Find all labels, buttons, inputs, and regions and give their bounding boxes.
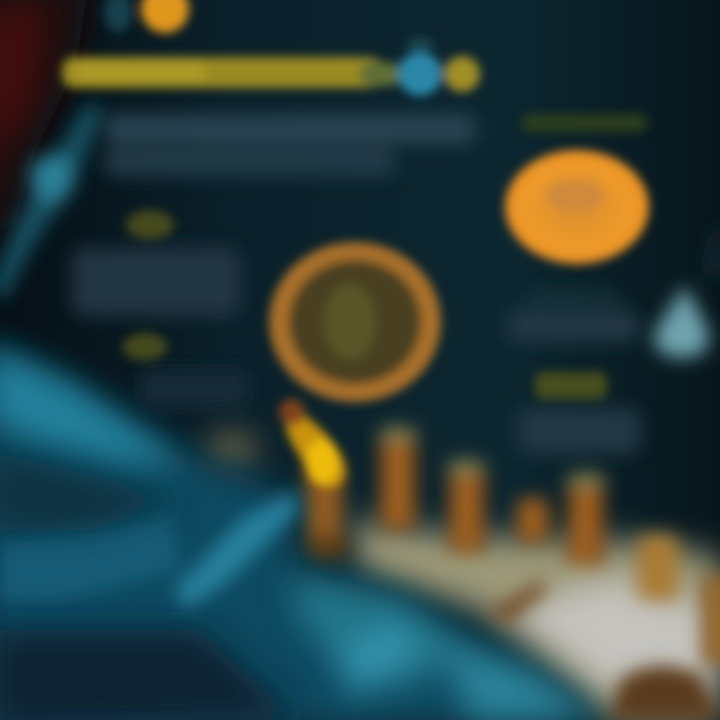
stack 5 xyxy=(566,472,606,565)
cloth highlight: upper fold xyxy=(0,350,190,465)
title bar xyxy=(62,38,480,96)
left heading 1 xyxy=(126,210,174,240)
right text block 1 xyxy=(508,290,638,342)
coin stacks xyxy=(300,426,720,720)
left text block 2 xyxy=(140,370,248,408)
cloth highlight: middle fold xyxy=(0,490,300,610)
left heading 2 xyxy=(123,333,167,361)
icon: flame xyxy=(279,399,345,488)
stack 7 xyxy=(490,575,720,720)
figure: dark red hair xyxy=(0,0,90,240)
stack 6 xyxy=(638,535,678,600)
right heading 2 xyxy=(535,372,607,400)
ring coin xyxy=(269,242,441,402)
figure: blue collar strip xyxy=(0,105,105,300)
top coin xyxy=(104,0,189,33)
table: cream base xyxy=(206,432,720,720)
stack 1 xyxy=(300,460,348,562)
right text block 2 xyxy=(518,408,640,454)
stack 2 xyxy=(378,426,418,530)
stack 4 xyxy=(516,498,550,543)
left text block 1 xyxy=(72,248,240,316)
icon: water drop xyxy=(654,225,720,358)
stack 3 xyxy=(446,459,486,553)
figure: blue cloth sleeve xyxy=(0,335,600,720)
cloth highlight: lower fold xyxy=(290,575,600,720)
right heading xyxy=(522,114,647,132)
orange coin xyxy=(505,150,649,264)
cloth shadows xyxy=(0,450,300,720)
intro text block xyxy=(105,115,475,176)
